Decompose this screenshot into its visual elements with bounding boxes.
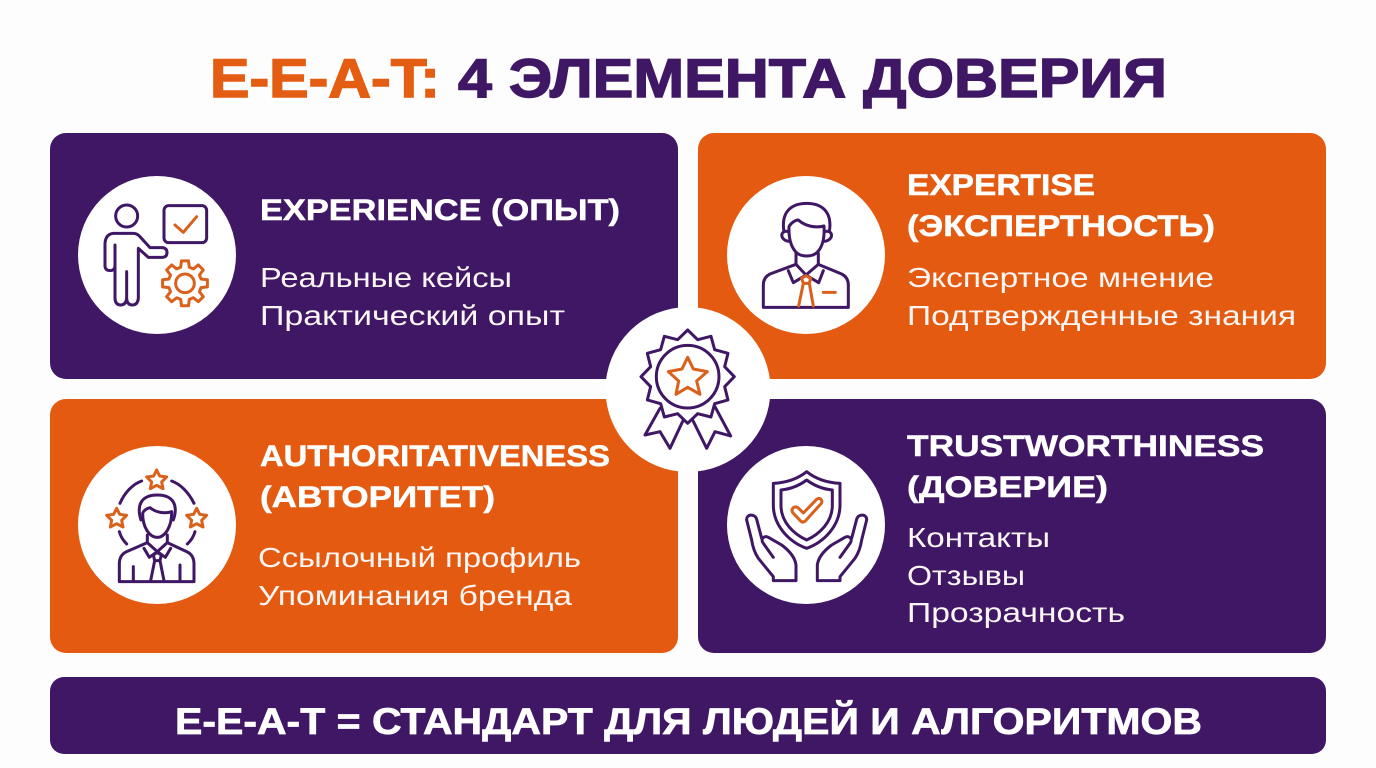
heading: expertise: (ЭКСПЕРТНОСТЬ) [907,210,1215,243]
heading: trustworthiness: (ДОВЕРИЕ) [907,471,1108,504]
heading: trustworthiness [907,430,1264,504]
heading: trustworthiness: TRUSTWORTHINESS [907,430,1264,463]
text: expertise items: Экспертное мнение [907,262,1214,293]
heading: authoritativeness: (АВТОРИТЕТ) [260,481,495,514]
text: experience items [260,262,565,331]
heading: expertise: EXPERTISE [907,169,1095,202]
footer banner [50,677,1326,754]
heading: expertise [907,169,1215,243]
text: expertise items: Подтвержденные знания [907,300,1296,331]
panel: experience [50,133,678,379]
title: E-E-A-T: [210,47,440,109]
text: trustworthiness items: Контакты [907,522,1050,553]
text: trustworthiness items: Прозрачность [907,597,1125,628]
text: trustworthiness items: Отзывы [907,560,1025,591]
footer banner: E-E-A-T = СТАНДАРТ ДЛЯ ЛЮДЕЙ И АЛГОРИТМОВ [175,700,1202,742]
heading: experience: EXPERIENCE (ОПЫТ) [260,194,620,227]
text: trustworthiness items [907,522,1125,628]
icon: expert with tie [727,176,885,334]
panel: expertise [698,133,1326,379]
title: 4 ЭЛЕМЕНТА ДОВЕРИЯ [458,47,1167,109]
icon: person with stars [78,446,236,604]
text: experience items: Реальные кейсы [260,262,512,293]
panel: authoritativeness [50,399,678,653]
heading: authoritativeness [260,440,610,514]
icon: shield in hands [727,446,885,604]
text: authoritativeness items: Упоминания бренда [258,580,573,611]
icon: person with checkbox and gear [78,176,236,334]
text: experience items: Практический опыт [260,300,565,331]
text: expertise items [907,262,1296,331]
icon: central award badge [606,307,770,472]
heading: authoritativeness: AUTHORITATIVENESS [260,440,610,473]
title [210,47,1167,109]
text: authoritativeness items [258,542,581,611]
text: authoritativeness items: Ссылочный профиль [258,542,581,573]
panel: trustworthiness [698,399,1326,653]
